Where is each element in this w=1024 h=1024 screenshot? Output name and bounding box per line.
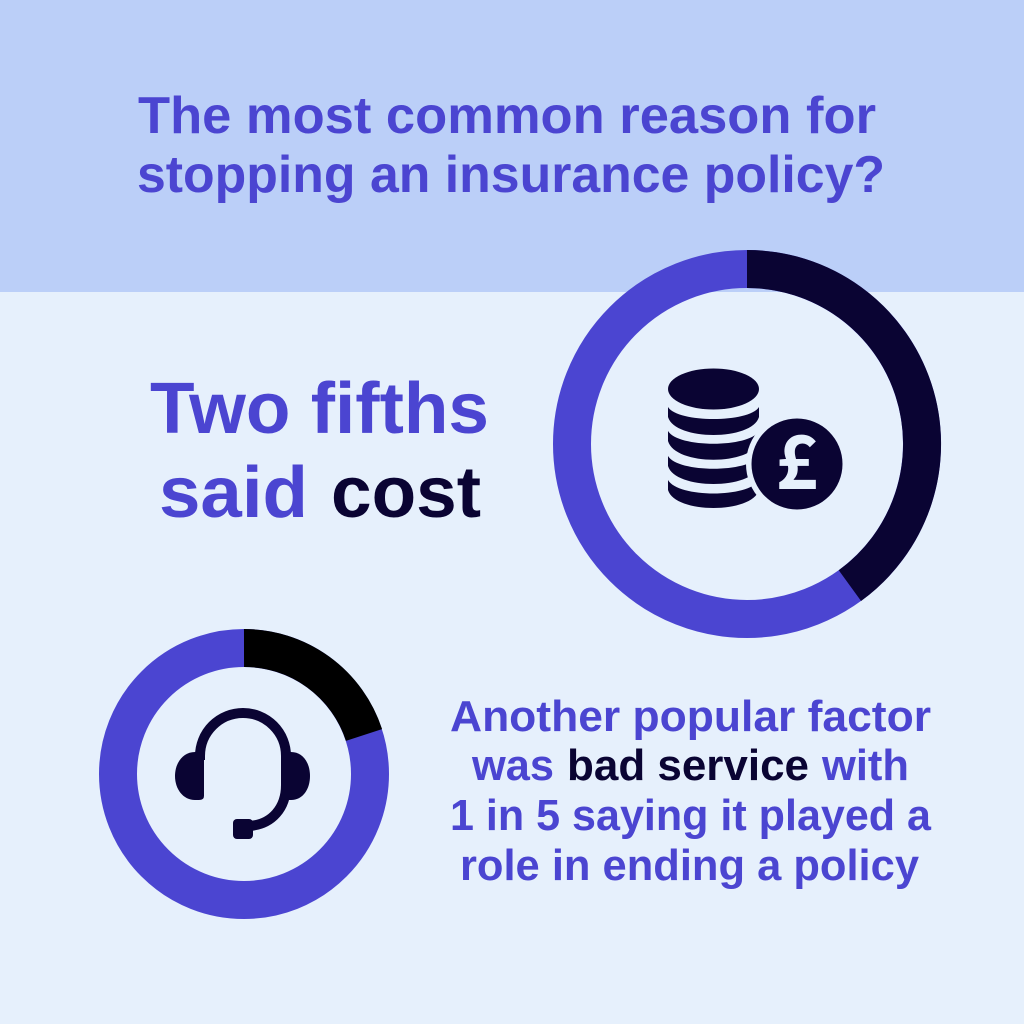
icon: coins with pound bbox=[668, 368, 848, 515]
title: The most common reason for bbox=[138, 87, 876, 145]
text block: bad service: role in ending a policy bbox=[460, 841, 920, 890]
text block: bad service: 1 in 5 saying it played a bbox=[450, 791, 932, 840]
text block: bad service: bad service bbox=[567, 741, 809, 790]
text block: bad service: was bbox=[471, 741, 554, 790]
donut chart: bad service bbox=[118, 648, 370, 900]
heading: two fifths said cost: Two fifths bbox=[150, 369, 489, 449]
text block: bad service bbox=[450, 692, 932, 890]
title bbox=[137, 87, 885, 204]
text block: bad service: with bbox=[821, 741, 909, 790]
icon: coins with pound: £ bbox=[775, 404, 819, 511]
heading: two fifths said cost bbox=[150, 369, 489, 533]
donut chart: cost bbox=[572, 269, 922, 619]
icon: headset bbox=[175, 713, 310, 839]
header band bbox=[0, 0, 1024, 292]
heading: two fifths said cost: cost bbox=[331, 453, 481, 533]
heading: two fifths said cost: said bbox=[159, 453, 308, 533]
title: stopping an insurance policy? bbox=[137, 146, 885, 204]
text block: bad service: Another popular factor bbox=[450, 692, 931, 741]
